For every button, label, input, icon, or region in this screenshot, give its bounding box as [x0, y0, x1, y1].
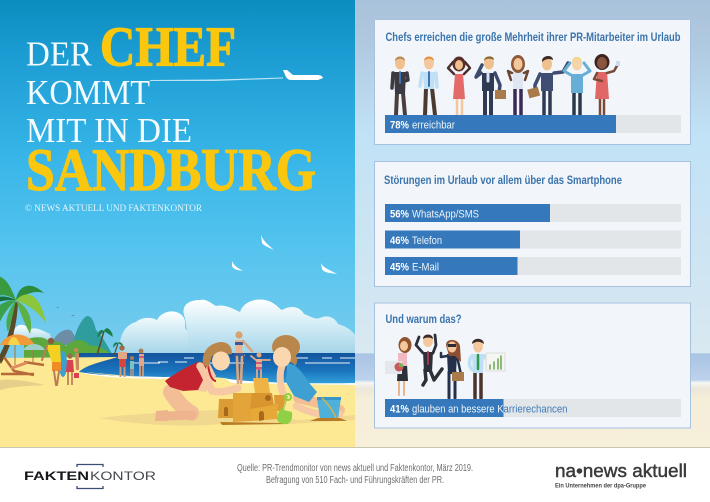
- man with surfboard: [42, 338, 67, 385]
- source note: Quelle: PR-Trendmonitor von news aktuell und Faktenkontor, März 2019.: [237, 463, 473, 474]
- logo: news aktuell: Ein Unternehmen der dpa-Gruppe: [555, 482, 646, 490]
- woman in blue swimsuit: [272, 335, 340, 415]
- bar 46%: Telefon: [412, 235, 442, 247]
- title: MIT IN DIE: [26, 111, 192, 150]
- girl in red: [66, 353, 79, 385]
- small palm: [97, 328, 123, 355]
- panel: why: [374, 303, 690, 428]
- person 4: [476, 56, 506, 115]
- jumping man: [416, 334, 442, 385]
- logo: Faktenkontor: [24, 464, 156, 488]
- person 6: [527, 56, 568, 115]
- contrail: [150, 78, 283, 81]
- beach umbrellas and loungers: [0, 334, 45, 390]
- logo: news aktuell: [555, 461, 687, 490]
- standing woman and child: [234, 331, 270, 383]
- bar 56%: 56%: [390, 208, 409, 220]
- sea: [78, 353, 355, 385]
- bar 46%: 46%: [390, 235, 409, 247]
- green sand shovel: [277, 394, 292, 424]
- sky background: [0, 0, 355, 447]
- bar 78%: 78%: [390, 120, 409, 132]
- person 3: [448, 56, 470, 115]
- bar 46%: [385, 230, 681, 248]
- bar 45%: E-Mail: [412, 262, 439, 274]
- right side background: [355, 0, 710, 447]
- heading: Störungen im Urlaub vor allem über das Smartphone: [384, 175, 622, 187]
- source note: Befragung von 510 Fach- und Führungskräften der PR.: [266, 475, 444, 486]
- person 7: [564, 57, 590, 115]
- bar 45%: [385, 257, 681, 275]
- woman with briefcase: [441, 340, 464, 398]
- logo: Faktenkontor: KONTOR: [90, 471, 156, 483]
- woman in red swimsuit: [155, 342, 238, 421]
- people row: [392, 54, 620, 115]
- sand beach: [0, 357, 355, 447]
- logo: news aktuell: na•news aktuell: [555, 461, 687, 481]
- mountains: [24, 316, 114, 358]
- blue bucket: [310, 397, 347, 421]
- distant beach people: [42, 328, 144, 385]
- career people: [385, 334, 505, 398]
- person 1: [392, 56, 408, 115]
- copyright line: © NEWS AKTUELL UND FAKTENKONTOR: [25, 203, 202, 213]
- person 5: [508, 55, 528, 115]
- airplane: [283, 70, 323, 80]
- seagulls: [56, 235, 337, 316]
- clouds: [14, 300, 355, 353]
- bar 41%: 41%: [390, 404, 409, 416]
- title: DER: [26, 34, 93, 74]
- woman: [139, 349, 144, 376]
- woman on beach left: [74, 348, 79, 370]
- bar 41%: arrierechancen: [504, 404, 568, 416]
- bar 56%: WhatsApp/SMS: [412, 208, 479, 220]
- palm tree: [0, 276, 46, 364]
- man with chart board: [469, 339, 505, 398]
- woman with pie chart: [385, 337, 412, 395]
- panel: disturbances: [374, 162, 690, 286]
- title: CHEF: [100, 16, 236, 78]
- bar 78%: erreichbar: [412, 120, 455, 132]
- source note: [237, 463, 473, 486]
- title: SANDBURG: [26, 137, 316, 203]
- title: [26, 16, 316, 203]
- bar 41%: glauben an bessere K: [412, 404, 504, 416]
- sand shadow: [100, 410, 355, 426]
- heading: Und warum das?: [386, 314, 462, 326]
- title: KOMMT: [26, 73, 150, 112]
- bar 45%: 45%: [390, 262, 409, 274]
- bar 56%: [385, 204, 681, 222]
- sand castle: [218, 378, 290, 425]
- person 2: [420, 56, 437, 115]
- man in red shorts: [118, 345, 127, 377]
- footer: [0, 447, 710, 502]
- person 8: [594, 54, 620, 115]
- child: [130, 356, 134, 376]
- bar 41%: [385, 399, 681, 417]
- logo: Faktenkontor: FAKTEN: [24, 471, 89, 483]
- panel: reachability: [374, 20, 690, 144]
- bar 78%: [385, 115, 681, 133]
